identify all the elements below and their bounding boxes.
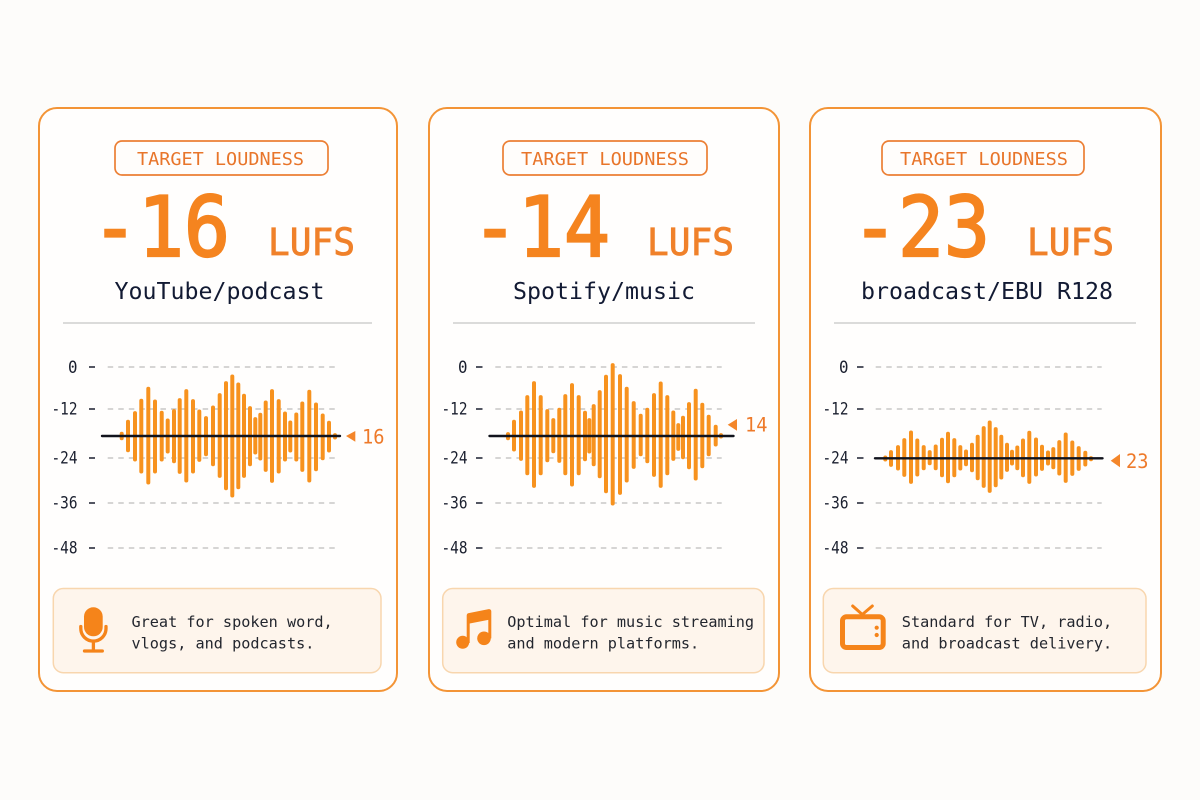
axis labels: -24 — [442, 448, 468, 468]
value: -14: -14 — [472, 179, 610, 276]
badge: target loudness: TARGET LOUDNESS — [137, 150, 304, 170]
panel: broadcast/EBU R128 — [810, 108, 1161, 691]
callout: music streaming — [443, 588, 764, 673]
axis labels — [52, 358, 78, 558]
chart: waveform against LUFS scale — [52, 358, 384, 558]
note text: Standard for TV, radio, — [902, 613, 1112, 631]
axis labels: -36 — [52, 494, 78, 514]
marker: 23: 23 — [1126, 450, 1148, 473]
note text: vlogs, and podcasts. — [132, 635, 314, 653]
marker: 23 — [1111, 450, 1148, 473]
callout: broadcast delivery — [823, 588, 1146, 673]
axis labels: 0 — [458, 358, 468, 378]
target line — [102, 435, 340, 437]
platform name: Spotify/music — [513, 278, 695, 305]
panel: Spotify/music — [429, 108, 779, 691]
axis labels — [822, 358, 848, 558]
waveform — [885, 422, 1091, 491]
chart: waveform against LUFS scale — [822, 358, 1148, 558]
badge: target loudness: TARGET LOUDNESS — [521, 150, 689, 170]
icon: microphone — [81, 607, 106, 651]
badge: target loudness: TARGET LOUDNESS — [900, 150, 1068, 170]
value: -23: -23 — [852, 179, 990, 276]
axis labels: 0 — [68, 358, 78, 378]
unit: LUFS: LUFS — [268, 221, 355, 264]
badge: target loudness — [503, 141, 707, 175]
axis labels: -36 — [822, 494, 848, 514]
axis labels: -48 — [52, 538, 78, 558]
badge: target loudness — [882, 141, 1084, 175]
axis labels: -12 — [442, 400, 468, 420]
axis labels: -48 — [822, 538, 848, 558]
marker: 16 — [346, 426, 384, 448]
unit: LUFS: LUFS — [647, 221, 734, 264]
axis labels: -12 — [822, 400, 848, 420]
axis labels: -36 — [442, 494, 468, 514]
badge: target loudness — [115, 141, 328, 175]
axis labels — [442, 358, 468, 558]
target line — [875, 457, 1102, 459]
note text: Great for spoken word, — [132, 613, 333, 631]
note text: Optimal for music streaming — [507, 613, 754, 631]
note text: and broadcast delivery. — [902, 635, 1112, 653]
waveform — [508, 365, 721, 504]
marker: 16: 16 — [362, 426, 384, 448]
axis labels: -12 — [52, 400, 78, 420]
platform name: broadcast/EBU R128 — [861, 278, 1113, 305]
marker: 14 — [728, 414, 768, 436]
marker: 14: 14 — [745, 414, 768, 436]
target line — [490, 435, 734, 437]
icon: music notes — [456, 609, 491, 649]
waveform — [122, 376, 335, 496]
value: -16: -16 — [92, 179, 230, 276]
axis labels: -24 — [822, 448, 848, 468]
icon: television — [842, 606, 883, 648]
axis labels: -48 — [442, 538, 468, 558]
unit: LUFS: LUFS — [1027, 221, 1114, 264]
platform name: YouTube/podcast — [114, 278, 324, 305]
axis labels: 0 — [839, 358, 848, 378]
axis labels: -24 — [52, 448, 78, 468]
chart: waveform against LUFS scale — [442, 358, 768, 558]
note text: and modern platforms. — [507, 635, 699, 653]
callout: spoken word — [53, 588, 381, 673]
panel: YouTube/podcast — [39, 108, 397, 691]
